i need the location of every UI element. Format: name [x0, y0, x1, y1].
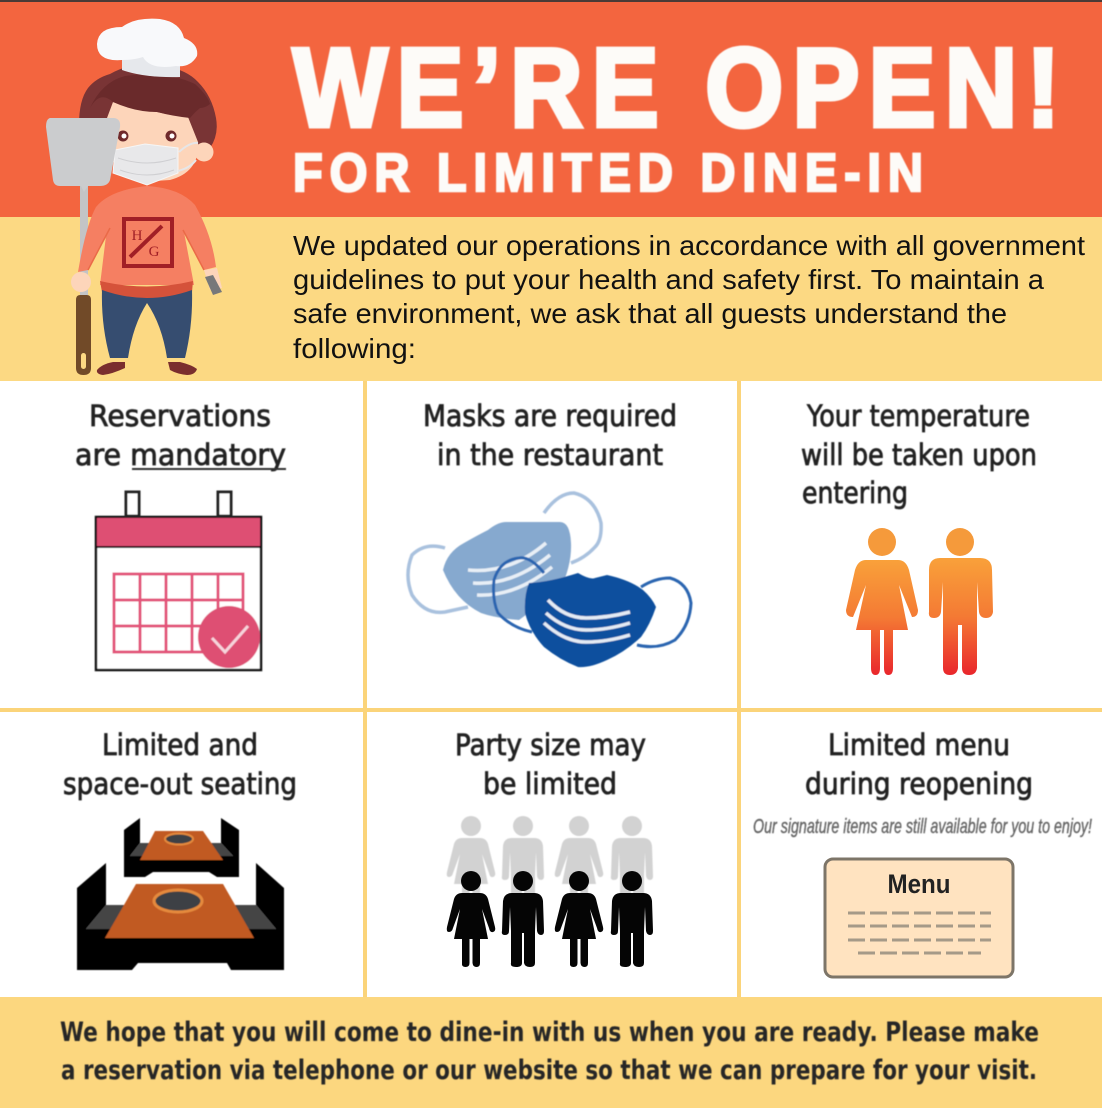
- chef sweater with logo: G: [149, 244, 160, 260]
- face mask: [113, 143, 198, 185]
- panel: masks: [408, 399, 691, 667]
- heading: Masks are required: [423, 399, 677, 433]
- footer text: [60, 1017, 1039, 1086]
- header banner background: [0, 0, 1102, 217]
- hands and phone: [71, 268, 222, 295]
- heading: Limited menu: [828, 728, 1010, 762]
- panel: menu: [753, 728, 1092, 977]
- intro text: safe environment, we ask that all guests understand the: [293, 298, 1007, 329]
- icon: orange figures: [846, 528, 993, 675]
- chef pants and shoes: [97, 290, 197, 375]
- intro text: [293, 230, 1085, 364]
- chef hair and head: [79, 64, 217, 182]
- intro text: We updated our operations in accordance with all government: [293, 230, 1085, 261]
- icon: calendar: [96, 492, 261, 670]
- heading: Reservations: [89, 399, 271, 433]
- panel: temperature: [801, 399, 1037, 675]
- heading: entering: [802, 476, 908, 510]
- panel: seating: [63, 728, 297, 970]
- heading: are mandatory: [75, 438, 286, 472]
- icon: spatula handle: [76, 184, 91, 375]
- heading: [423, 399, 677, 472]
- heading: [455, 728, 646, 801]
- intro text: guidelines to put your health and safety first. To maintain a: [293, 264, 1045, 295]
- heading: [805, 728, 1033, 801]
- chef sweater with logo: H: [132, 228, 143, 244]
- heading: [75, 399, 286, 472]
- title: WE’RE OPEN!: [293, 26, 1060, 150]
- heading: [63, 728, 297, 801]
- heading: be limited: [483, 767, 617, 801]
- icon: face masks: [408, 493, 691, 667]
- heading: Party size may: [455, 728, 646, 762]
- icon: gray people row: [447, 816, 653, 912]
- panel: party size: [447, 728, 653, 967]
- heading: in the restaurant: [437, 438, 663, 472]
- heading: will be taken upon: [801, 438, 1037, 472]
- icon: booth tables: [77, 818, 284, 970]
- intro band background: [0, 217, 1102, 381]
- panel: reservations: [75, 399, 286, 670]
- heading: Your temperature: [806, 399, 1030, 433]
- chef character: [46, 19, 222, 375]
- footer band: [0, 997, 1102, 1108]
- heading: space-out seating: [63, 767, 297, 801]
- heading: [801, 399, 1037, 510]
- heading: during reopening: [805, 767, 1033, 801]
- icon: menu card: Menu: [888, 869, 950, 899]
- panel grid background: [0, 381, 1102, 997]
- icon: black people row: [447, 871, 653, 967]
- heading: Limited and: [102, 728, 258, 762]
- chef hat: [97, 19, 197, 77]
- spatula blade: [46, 118, 120, 192]
- intro text: following:: [293, 333, 416, 364]
- chef sweater with logo: [78, 186, 216, 299]
- icon: menu card: [825, 859, 1013, 977]
- subtitle: FOR LIMITED DINE-IN: [293, 142, 923, 203]
